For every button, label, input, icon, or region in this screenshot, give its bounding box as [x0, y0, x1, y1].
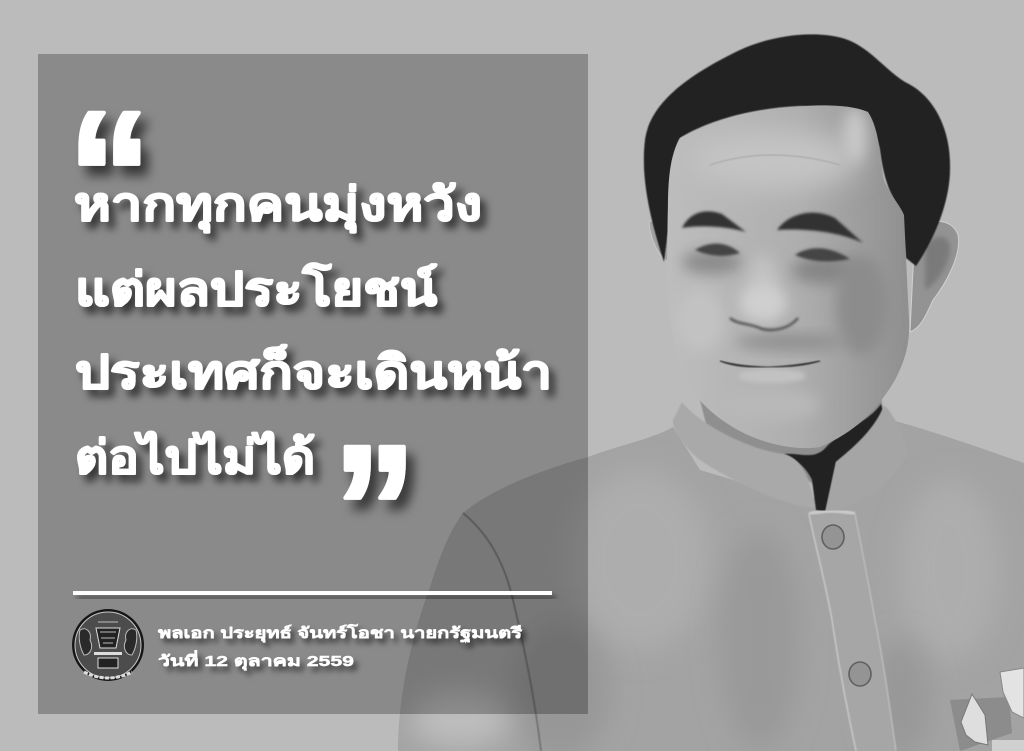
- shirt opening: [784, 404, 884, 512]
- jacket body: [398, 420, 1024, 751]
- quote line 1: หากทุกคนมุ่งหวัง: [74, 178, 482, 233]
- portrait photo: [398, 34, 1024, 751]
- eyebrows: [682, 211, 863, 243]
- neck: [700, 385, 885, 500]
- quote line 3: ประเทศก็จะเดินหน้า: [75, 344, 552, 398]
- opening quote mark: “: [68, 74, 151, 275]
- ears: [649, 221, 959, 332]
- eyes: [695, 244, 850, 261]
- placket with buttons: [809, 511, 896, 751]
- collar: [673, 402, 908, 512]
- quote line 2: แต่ผลประโยชน์: [75, 262, 438, 315]
- face: [667, 105, 909, 448]
- attribution text: [158, 623, 523, 671]
- closing quote mark: ”: [333, 408, 416, 609]
- quote line 4: ต่อไปไม่ได้: [75, 431, 315, 483]
- divider rule: [73, 591, 552, 595]
- date: วันที่ 12 ตุลาคม 2559: [158, 650, 354, 671]
- panel: quote background: [38, 54, 588, 714]
- sleeve seam: [463, 513, 541, 751]
- hair: [644, 34, 950, 266]
- speaker name: พลเอก ประยุทธ์ จันทร์โอชา นายกรัฐมนตรี: [158, 623, 523, 643]
- mouth: [720, 361, 820, 383]
- nose: [730, 284, 798, 330]
- chest pocket pin: [950, 668, 1024, 751]
- quote text: [74, 178, 552, 483]
- icon: government seal: [72, 609, 144, 681]
